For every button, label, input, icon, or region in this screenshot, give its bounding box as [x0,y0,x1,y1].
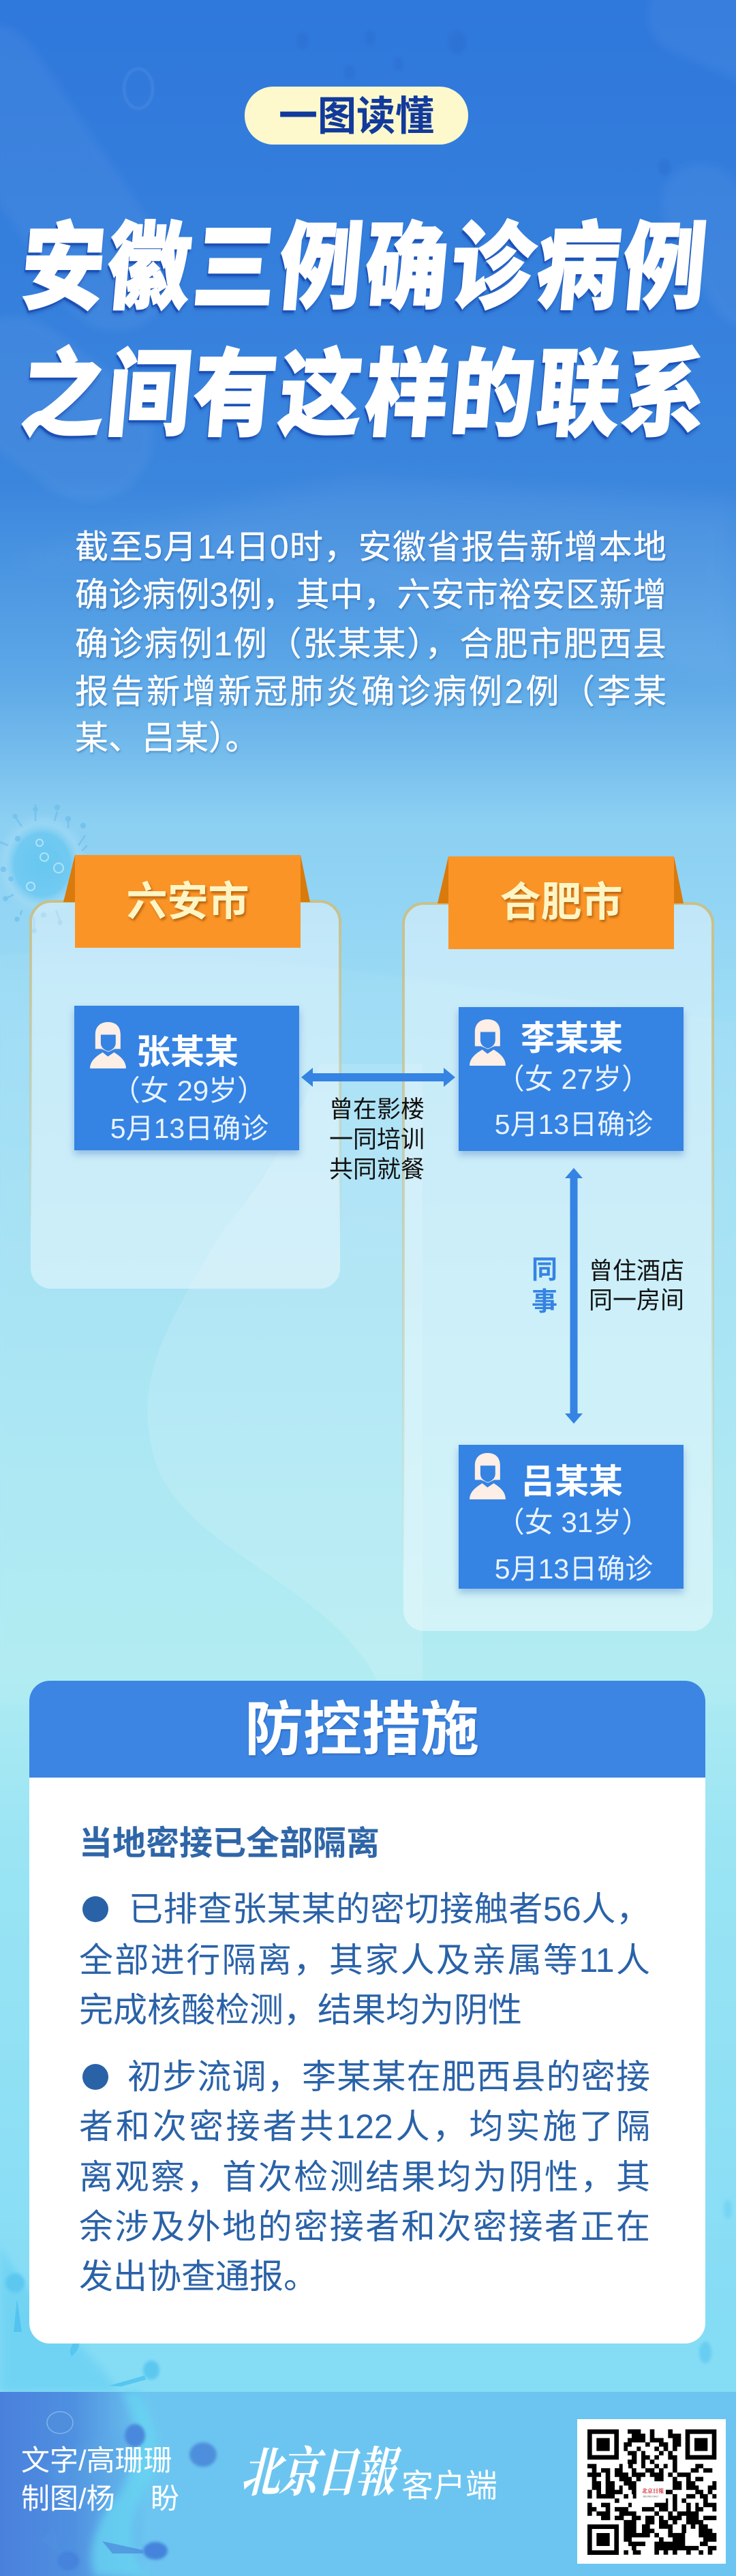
label: 同事: 同 [532,1256,557,1285]
age: （女 29岁） [112,1075,266,1107]
note: same hotel room: 曾住酒店 [589,1258,684,1285]
panel: 防控措施 [29,1681,705,2343]
bullet paragraph 2: 发出协查通报。 [79,2258,318,2296]
confirmed date: 5月13日确诊 [110,1113,269,1144]
city name: 六安市 [127,879,249,925]
panel body [402,902,714,1631]
city name: 合肥市 [500,880,623,925]
age: （女 27岁） [496,1063,650,1095]
bullet paragraph 2: 余涉及外地的密接者和次密接者正在 [79,2208,650,2246]
QR code [577,2419,726,2564]
bullet paragraph 1: 全部进行隔离，其家人及亲属等11人 [79,1941,650,1979]
intro paragraph: 确诊病例1例（张某某），合肥市肥西县 [75,626,666,663]
note: shared activities: 一同培训 [329,1126,425,1153]
label: 同事 [532,1256,557,1317]
arrow: 张某某 to 李某某 [301,1068,455,1087]
bullet paragraph 2 [79,2058,650,2296]
note: same hotel room [589,1258,684,1314]
credits: 盼 [151,2483,179,2515]
name: 吕某某 [521,1463,623,1501]
panel: 合肥市 [402,856,714,1631]
icon: woman [90,1022,126,1068]
bullet paragraph 1: 完成核酸检测，结果均为阴性 [79,1991,522,2029]
note: shared activities: 共同就餐 [329,1156,425,1183]
bullet [82,2064,108,2090]
orange city tag [63,855,310,948]
intro paragraph [75,529,666,757]
case card: 吕某某 [459,1445,684,1589]
confirmed date: 5月13日确诊 [495,1553,653,1585]
intro paragraph: 截至5月14日0时，安徽省报告新增本地 [75,529,666,566]
section heading: 防控措施 [245,1697,479,1763]
arrow: 李某某 to 吕某某 [565,1168,583,1424]
note: shared activities [329,1096,425,1183]
logo: 北京日報客户端 [237,2443,497,2504]
virus behind lower card [0,2200,732,2392]
name: 张某某 [136,1033,239,1071]
QR code: BEIJING DAILY [643,2496,660,2498]
case card: 张某某 [74,1006,299,1150]
app label: 客户端 [401,2468,497,2504]
credits: 文字/高珊珊 [21,2444,172,2476]
orange city tag [438,856,684,949]
bullet [82,1896,108,1922]
bullet paragraph 2: 者和次密接者共122人，均实施了隔 [79,2108,650,2146]
intro paragraph: 报告新增新冠肺炎确诊病例2例（李某 [75,674,666,710]
case card: 李某某 [459,1007,684,1151]
virus top-left of the panels [0,805,89,933]
icon: woman [470,1019,506,1066]
icon: woman [470,1453,506,1499]
bullet paragraph 2: 离观察，首次检测结果均为阴性，其 [79,2158,650,2196]
age: （女 31岁） [496,1506,650,1538]
credits: 制图/杨 [21,2483,115,2515]
intro paragraph: 确诊病例3例，其中，六安市裕安区新增 [75,577,666,614]
note: shared activities: 曾在影楼 [329,1096,425,1123]
bullet paragraph 1: 已排查张某某的密切接触者56人， [129,1890,650,1928]
credits [21,2444,179,2515]
title line 2: 之间有这样的联系 [17,342,714,448]
name: 李某某 [521,1019,623,1058]
section header [29,1681,705,1778]
footer band [0,2392,736,2576]
title line 1: 安徽三例确诊病例 [17,215,714,321]
note: same hotel room: 同一房间 [589,1287,684,1314]
title [17,215,714,448]
intro paragraph: 某、吕某）。 [75,720,259,757]
label: 同事: 事 [532,1288,557,1317]
calligraphy wordmark: 北京日報 [237,2443,405,2503]
panel: 六安市 [29,855,341,1289]
tag pill: 一图读懂 [245,87,468,145]
sub heading: 当地密接已全部隔离 [79,1825,380,1862]
pill text: 一图读懂 [279,93,434,140]
panel body [29,900,341,1289]
confirmed date: 5月13日确诊 [495,1109,653,1140]
bullet paragraph 2: 初步流调，李某某在肥西县的密接 [127,2058,650,2096]
QR code: 北京日報 [642,2487,664,2494]
bullet paragraph 1 [79,1890,650,2029]
